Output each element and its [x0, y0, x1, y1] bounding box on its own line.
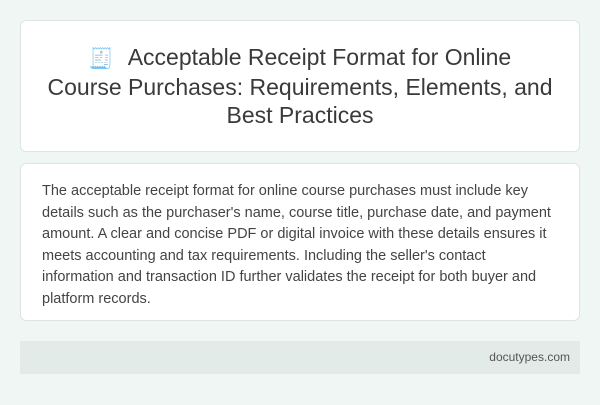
title panel: Course Purchases: Requirements, Elements, and [48, 74, 552, 100]
description panel: meets accounting and tax requirements. Including the seller's contact [42, 248, 486, 264]
description panel: amount. A clear and concise PDF or digital invoice with these details ensures it [42, 226, 547, 242]
description panel: information and transaction ID further validates the receipt for both buyer and [42, 269, 536, 285]
title panel: Best Practices [226, 102, 374, 128]
title panel [20, 20, 580, 152]
description panel: The acceptable receipt format for online course purchases must include key [42, 183, 528, 199]
footer [20, 341, 580, 374]
description panel: platform records. [42, 290, 151, 306]
footer: docutypes.com [489, 350, 570, 364]
description panel [20, 163, 580, 321]
description panel: details such as the purchaser's name, course title, purchase date, and payment [42, 204, 551, 220]
title panel: 🧾 Acceptable Receipt Format for Online [89, 44, 511, 70]
